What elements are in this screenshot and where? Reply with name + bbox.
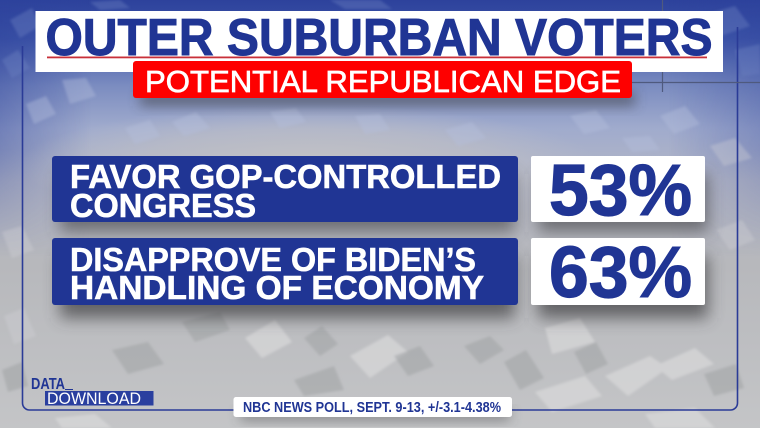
source note: NBC NEWS POLL, SEPT. 9-13, +/-3.1-4.38%: [243, 400, 501, 416]
logo: Data Download: DATA: [31, 376, 65, 393]
panel: disapprove of Biden's handling of economy: [52, 238, 518, 306]
panel: favor GOP-controlled Congress: FAVOR GOP-CONTROLLED: [70, 158, 501, 195]
panel: favor GOP-controlled Congress: [52, 156, 518, 224]
title banner: [36, 9, 723, 72]
panel: disapprove of Biden's handling of economy: HANDLING OF ECONOMY: [70, 269, 484, 306]
title underline: [47, 56, 707, 58]
panel: favor GOP-controlled Congress: CONGRESS: [70, 187, 256, 224]
panel shadows: [60, 92, 708, 420]
subtitle banner: POTENTIAL REPUBLICAN EDGE: [145, 64, 621, 99]
panel: disapprove of Biden's handling of economy: DISAPPROVE OF BIDEN’S: [70, 241, 476, 278]
stat: 63 percent: 63%: [549, 233, 692, 313]
grid lines top right: [632, 0, 760, 92]
logo: Data Download: [31, 376, 154, 408]
stat: 53 percent: 53%: [549, 151, 692, 231]
logo: Data Download: DOWNLOAD: [47, 389, 141, 408]
title text: OUTER SUBURBAN VOTERS: [46, 9, 712, 67]
